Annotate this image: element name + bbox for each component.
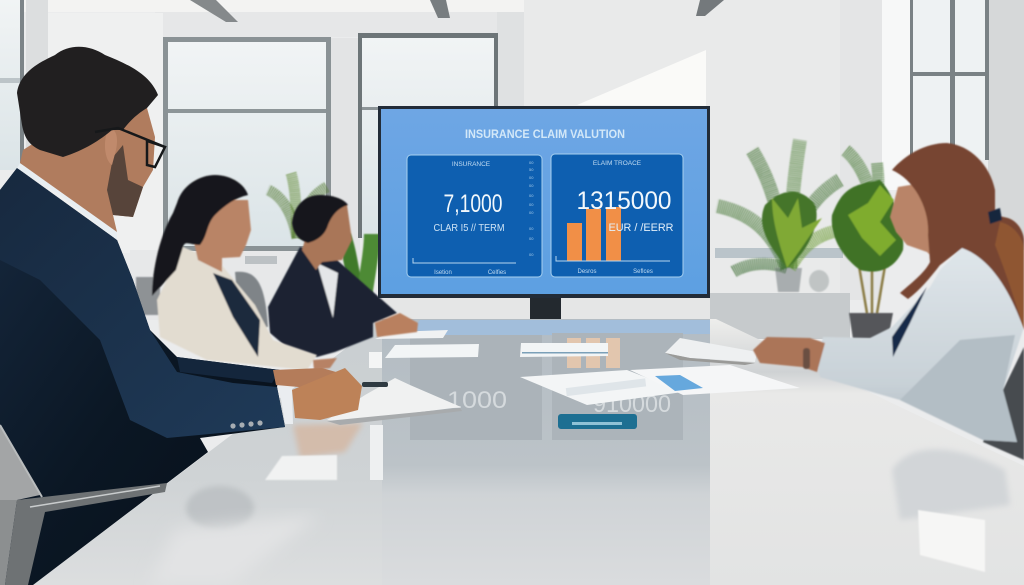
orange bars xyxy=(567,207,621,261)
pen xyxy=(362,382,388,387)
left dashboard panel: CLAR I5 // TERM xyxy=(434,222,504,234)
left dashboard panel: INSURANCE xyxy=(452,161,491,168)
screen title: INSURANCE CLAIM VALUTION xyxy=(465,129,625,141)
document: back left xyxy=(385,344,479,358)
left dashboard panel: 00 xyxy=(529,252,534,257)
potted plant two xyxy=(832,150,903,339)
potted plant one xyxy=(717,140,843,292)
left dashboard panel xyxy=(407,155,542,277)
person: man in navy suit xyxy=(0,47,388,585)
left dashboard panel: 00 xyxy=(529,226,534,231)
head xyxy=(20,108,155,232)
table reflection of screen panels: 1000 xyxy=(447,387,507,414)
windows xyxy=(0,0,989,251)
person: woman in white blazer right xyxy=(753,143,1024,460)
document: back left small xyxy=(375,330,448,339)
left dashboard panel: 7,1000 xyxy=(444,190,502,218)
right dashboard panel with orange bars: Desros xyxy=(577,269,597,275)
monitor stand xyxy=(530,296,561,320)
reflection of right woman xyxy=(892,449,1010,520)
right dashboard panel with orange bars: Seflces xyxy=(633,269,653,275)
open folder right xyxy=(665,338,757,362)
office chair left xyxy=(0,425,167,585)
right dashboard panel with orange bars: 1315000 xyxy=(576,187,672,215)
left dashboard panel: 00 xyxy=(529,210,534,215)
left dashboard panel: 00 xyxy=(529,160,534,165)
right dashboard panel with orange bars xyxy=(551,154,683,277)
left dashboard panel: 50 xyxy=(529,167,534,172)
glasses xyxy=(95,128,165,167)
left dashboard panel: Celfies xyxy=(488,270,506,276)
plants behind left people xyxy=(268,173,372,297)
left dashboard panel: 00 xyxy=(529,236,534,241)
plants right xyxy=(717,140,903,339)
right dashboard panel with orange bars: ELAIM TROACE xyxy=(593,160,642,167)
table reflection of screen panels xyxy=(410,333,683,440)
open notebook xyxy=(327,378,461,422)
left dashboard panel: Isetion xyxy=(434,270,452,276)
sleeve buttons xyxy=(230,420,263,429)
document: center report xyxy=(520,370,683,405)
left dashboard panel: 00 xyxy=(529,183,534,188)
papers and phone on table xyxy=(327,330,800,429)
left dashboard panel: 00 xyxy=(529,175,534,180)
table reflection of screen panels: 910000 xyxy=(593,391,671,418)
conference table xyxy=(33,319,1024,585)
cabinet and shelf on right xyxy=(710,248,850,339)
left dashboard panel: 00 xyxy=(529,202,534,207)
ceiling lights xyxy=(190,0,238,22)
document: back center xyxy=(520,343,608,357)
monitor xyxy=(378,106,710,320)
person: far woman in black suit xyxy=(268,195,418,357)
left dashboard panel: 00 xyxy=(529,193,534,198)
reflection of man's hand xyxy=(293,423,363,458)
phone xyxy=(558,414,637,429)
person: woman in cream jacket xyxy=(136,175,337,370)
right dashboard panel with orange bars: EUR / /EERR xyxy=(608,222,674,234)
